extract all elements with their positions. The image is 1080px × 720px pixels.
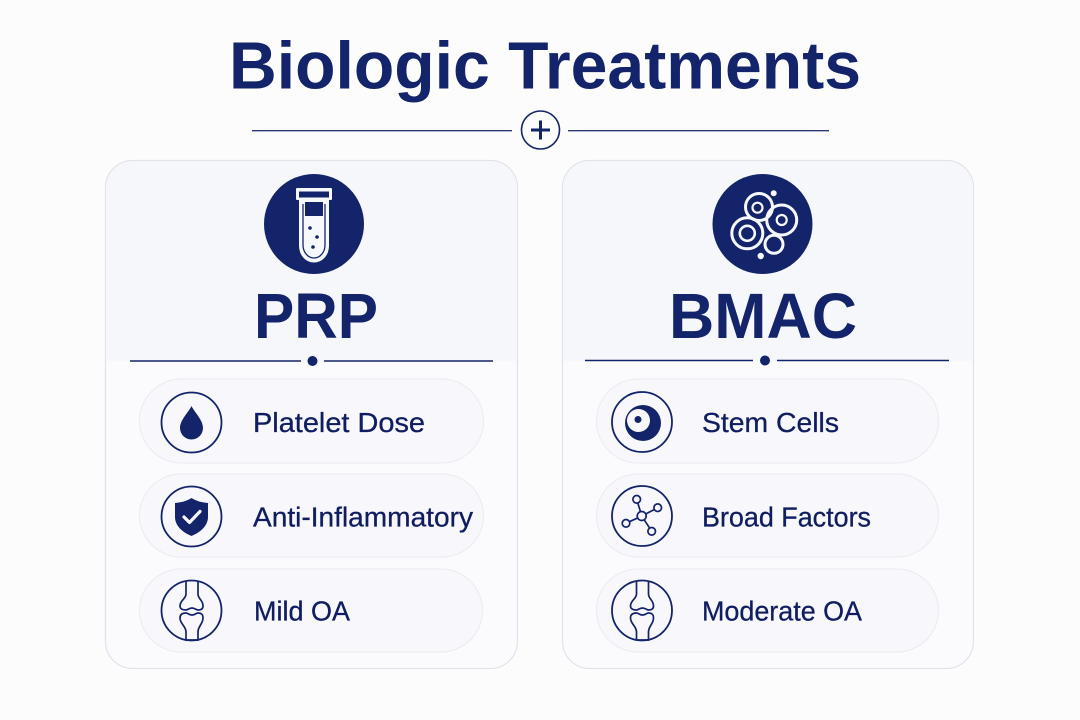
item: Mild OA bbox=[140, 569, 482, 652]
divider bbox=[130, 356, 493, 366]
icon: shield check bbox=[162, 486, 222, 546]
divider bbox=[585, 356, 949, 366]
item: Broad Factors bbox=[596, 474, 938, 557]
item: Platelet Dose bbox=[140, 379, 484, 463]
icon: cell cluster bbox=[712, 174, 812, 274]
heading: BMAC: BMAC bbox=[669, 280, 857, 352]
icon: molecule network bbox=[612, 486, 672, 546]
panel: BMAC bbox=[562, 160, 974, 668]
label: Stem Cells bbox=[702, 407, 839, 438]
item: Anti-Inflammatory bbox=[140, 474, 484, 557]
title divider with plus icon bbox=[252, 111, 829, 149]
label: Broad Factors bbox=[702, 502, 871, 533]
item: Stem Cells bbox=[596, 379, 938, 463]
title: Biologic Treatments bbox=[229, 28, 861, 104]
item: Moderate OA bbox=[596, 569, 938, 652]
label: Anti-Inflammatory bbox=[253, 502, 473, 533]
icon: stem cell bbox=[612, 392, 672, 452]
panel: PRP bbox=[106, 160, 518, 668]
icon: test tube bbox=[264, 174, 364, 274]
icon: blood drop bbox=[162, 392, 222, 452]
icon: knee joint bbox=[162, 580, 222, 640]
label: Mild OA bbox=[254, 596, 350, 627]
heading: PRP: PRP bbox=[254, 280, 378, 352]
label: Platelet Dose bbox=[253, 407, 425, 438]
icon: knee joint bbox=[612, 580, 672, 640]
label: Moderate OA bbox=[702, 596, 862, 627]
